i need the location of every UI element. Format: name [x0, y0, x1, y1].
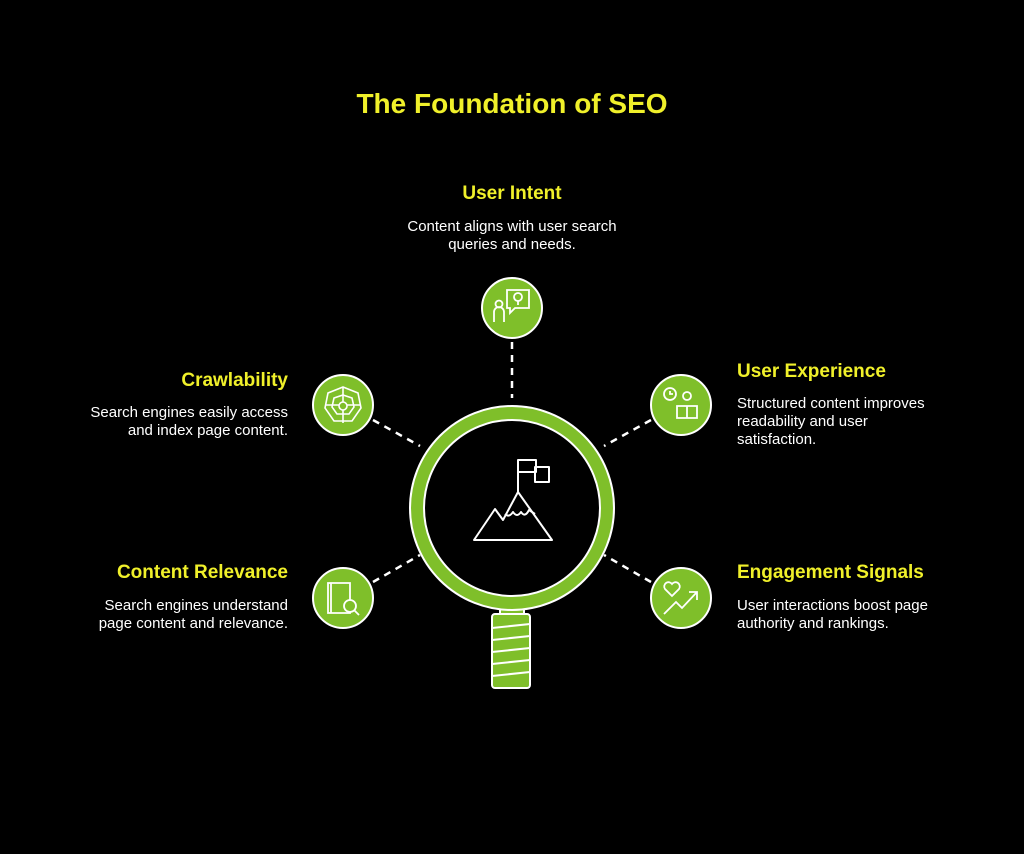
icon: mountain flag: [474, 460, 552, 540]
text: engagement signals: [737, 597, 928, 632]
icon circle: user experience: [651, 375, 711, 435]
text: content relevance: Search engines understand: [105, 597, 288, 614]
text: crawlability: Search engines easily access: [90, 404, 288, 421]
text: user experience: [737, 395, 925, 448]
text: user experience: satisfaction.: [737, 431, 816, 448]
heading: content relevance: Content Relevance: [117, 562, 288, 583]
text: crawlability: [90, 404, 288, 439]
text: engagement signals: User interactions boost page: [737, 597, 928, 614]
text: user experience: Structured content improves: [737, 395, 925, 412]
icon circle: crawlability: [313, 375, 373, 435]
icon circle: engagement signals: [651, 568, 711, 628]
icon circle: user intent: [482, 278, 542, 338]
text: content relevance: page content and relevance.: [99, 615, 288, 632]
text: engagement signals: authority and rankings.: [737, 615, 889, 632]
text: user intent: [407, 218, 617, 253]
text: crawlability: and index page content.: [128, 422, 288, 439]
heading: engagement signals: Engagement Signals: [737, 562, 924, 583]
heading: crawlability: Crawlability: [181, 370, 288, 391]
text: user intent: Content aligns with user search: [407, 218, 617, 235]
text: user intent: queries and needs.: [448, 236, 576, 253]
icon circle: content relevance: [313, 568, 373, 628]
title: The Foundation of SEO: [356, 88, 668, 119]
heading: user intent: User Intent: [462, 183, 562, 204]
heading: user experience: User Experience: [737, 361, 886, 382]
text: content relevance: [99, 597, 288, 632]
text: user experience: readability and user: [737, 413, 868, 430]
magnifying glass: [410, 406, 614, 688]
